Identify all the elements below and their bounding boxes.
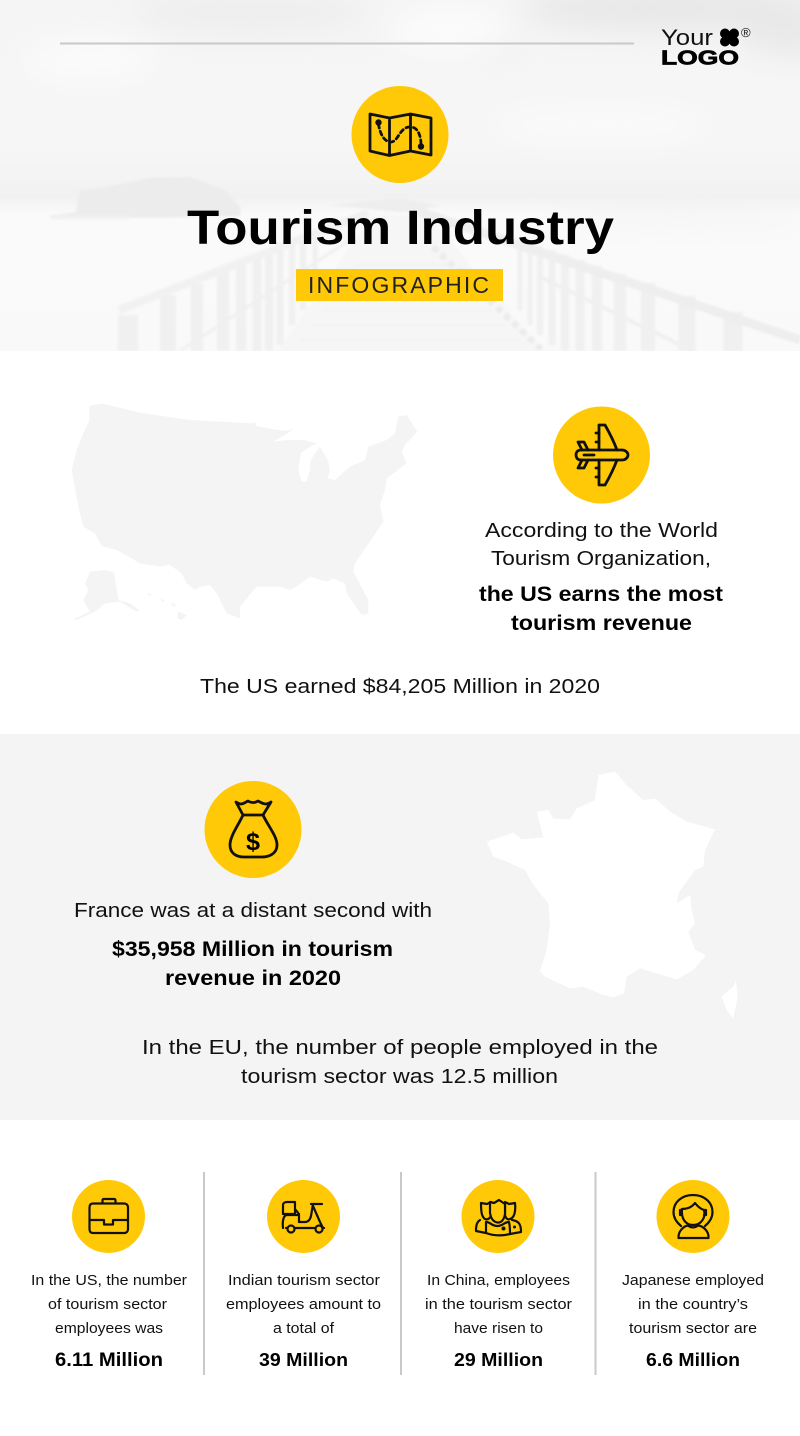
- stat column: US: employees was: [55, 1321, 163, 1337]
- icon: group of people: [462, 1180, 534, 1253]
- text block: World Tourism Organization: tourism revenue: [511, 612, 692, 635]
- stat column: India: 39 Million: [259, 1350, 348, 1370]
- subtitle badge: INFOGRAPHIC: [308, 272, 489, 298]
- text block: EU employment: In the EU, the number of people employed in the: [142, 1036, 658, 1059]
- icon: briefcase: [72, 1180, 145, 1253]
- text block: World Tourism Organization: the US earns the most: [479, 583, 723, 606]
- text block: France: $35,958 Million in tourism: [112, 938, 393, 961]
- stat column: Japan: in the country’s: [638, 1297, 748, 1313]
- logo: [661, 25, 751, 70]
- icon: airplane: [553, 406, 650, 504]
- text block: World Tourism Organization: According to the World: [485, 520, 718, 542]
- icon: money bag: [204, 781, 302, 878]
- text: US earnings: The US earned $84,205 Million in 2020: [200, 676, 600, 698]
- logo: ®: [741, 25, 751, 40]
- map: France: [487, 772, 738, 1018]
- stat column: India: a total of: [273, 1321, 335, 1337]
- text block: World Tourism Organization: Tourism Organization,: [491, 548, 711, 570]
- logo: LOGO: [661, 48, 739, 70]
- title: Tourism Industry: [187, 202, 614, 255]
- panel: hero photo background: [0, 0, 800, 351]
- stat column: US: In the US, the number: [31, 1273, 187, 1289]
- stat column: China: have risen to: [454, 1321, 543, 1337]
- stat column: Japan: Japanese employed: [622, 1273, 764, 1289]
- stat column: India: employees amount to: [226, 1297, 381, 1313]
- stat column: Japan: 6.6 Million: [646, 1350, 740, 1370]
- stat column: China: in the tourism sector: [425, 1297, 572, 1313]
- stat column: India: Indian tourism sector: [228, 1273, 380, 1289]
- stat column: India: [226, 1180, 381, 1370]
- icon: folded map: [352, 86, 448, 183]
- text block: EU employment: tourism sector was 12.5 million: [241, 1065, 558, 1088]
- header rule: [60, 42, 634, 44]
- text block: EU employment: [142, 1036, 658, 1088]
- icon: woman portrait: [656, 1180, 730, 1253]
- text block: France: [74, 900, 432, 990]
- icon: delivery scooter: [267, 1180, 340, 1253]
- icon: money bag: $: [246, 828, 260, 856]
- text block: World Tourism Organization: [479, 520, 723, 635]
- stat column: China: In China, employees: [427, 1273, 570, 1289]
- stat column: Japan: tourism sector are: [629, 1321, 757, 1337]
- stat column: US: [31, 1180, 187, 1371]
- stat column: China: [425, 1180, 572, 1370]
- stat column: Japan: [622, 1180, 764, 1370]
- text block: France: France was at a distant second with: [74, 900, 432, 922]
- panel: France band: [0, 734, 800, 1120]
- dividers: [203, 1172, 596, 1375]
- stat column: US: 6.11 Million: [55, 1349, 163, 1371]
- stat column: US: of tourism sector: [48, 1297, 167, 1313]
- stat column: China: 29 Million: [454, 1350, 543, 1370]
- logo: Your: [661, 25, 713, 50]
- map: United States: [72, 403, 417, 620]
- text block: France: revenue in 2020: [165, 967, 341, 990]
